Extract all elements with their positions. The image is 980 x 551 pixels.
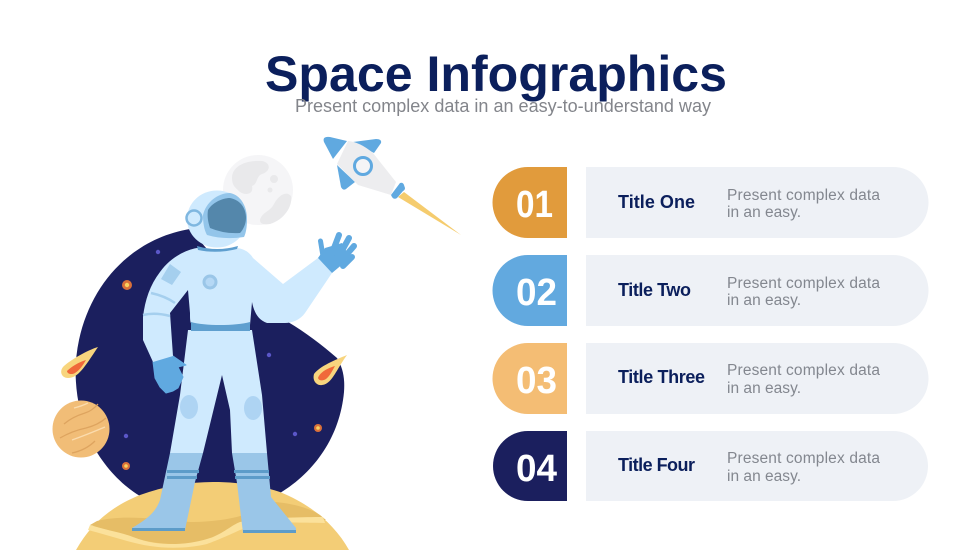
astronaut bbox=[132, 190, 354, 533]
row 2 bbox=[492, 255, 928, 326]
row 1: in an easy. bbox=[727, 204, 801, 221]
row 3 bbox=[492, 343, 928, 414]
chest button bbox=[202, 274, 218, 290]
moon bbox=[223, 155, 293, 225]
row 1: Title One bbox=[618, 192, 695, 212]
row 3: Title Three bbox=[618, 367, 705, 387]
row 3: Present complex data bbox=[727, 362, 880, 379]
row 3: in an easy. bbox=[727, 380, 801, 397]
row 3: 03 bbox=[516, 360, 557, 402]
title: Space Infographics bbox=[265, 46, 727, 102]
row 1: Present complex data bbox=[727, 187, 880, 204]
card 1 bbox=[586, 167, 928, 238]
row 2: in an easy. bbox=[727, 292, 801, 309]
number tab 01 bbox=[492, 167, 567, 238]
stars bbox=[122, 250, 322, 470]
helmet bbox=[186, 190, 247, 252]
card 2 bbox=[586, 255, 928, 326]
card 4 bbox=[586, 431, 928, 501]
belt bbox=[191, 322, 250, 331]
number tab 02 bbox=[492, 255, 567, 326]
row 1 bbox=[492, 167, 928, 238]
row 2: Title Two bbox=[618, 280, 691, 300]
row 2: 02 bbox=[516, 272, 557, 314]
number tab 03 bbox=[492, 343, 567, 414]
rocket bbox=[324, 137, 461, 235]
flame bbox=[398, 192, 461, 235]
row 4: Title Four bbox=[618, 455, 695, 475]
engine bbox=[391, 183, 405, 199]
porthole bbox=[354, 158, 372, 174]
row 1: 01 bbox=[516, 184, 553, 226]
row 4: in an easy. bbox=[727, 468, 801, 485]
number tab 04 bbox=[493, 431, 567, 501]
meteor right bbox=[314, 355, 347, 385]
legs bbox=[170, 330, 267, 453]
row 4 bbox=[493, 431, 928, 501]
meteor left bbox=[61, 347, 98, 378]
card 3 bbox=[586, 343, 928, 414]
dark space blob bbox=[76, 229, 344, 496]
torso and arms bbox=[143, 248, 332, 362]
lower glove bbox=[153, 356, 186, 393]
subtitle: Present complex data in an easy-to-understand way bbox=[295, 96, 711, 116]
raised glove bbox=[318, 235, 354, 273]
planet ground bbox=[76, 482, 349, 550]
row 2: Present complex data bbox=[727, 275, 880, 292]
illustration: astronaut in space bbox=[52, 137, 461, 550]
fins bbox=[324, 137, 347, 159]
sleeve bands and patch bbox=[143, 293, 175, 316]
row 4: Present complex data bbox=[727, 450, 880, 467]
row 4: 04 bbox=[516, 448, 557, 490]
orange planet bbox=[52, 400, 110, 458]
boots bbox=[132, 453, 203, 530]
rocket body bbox=[337, 141, 396, 195]
